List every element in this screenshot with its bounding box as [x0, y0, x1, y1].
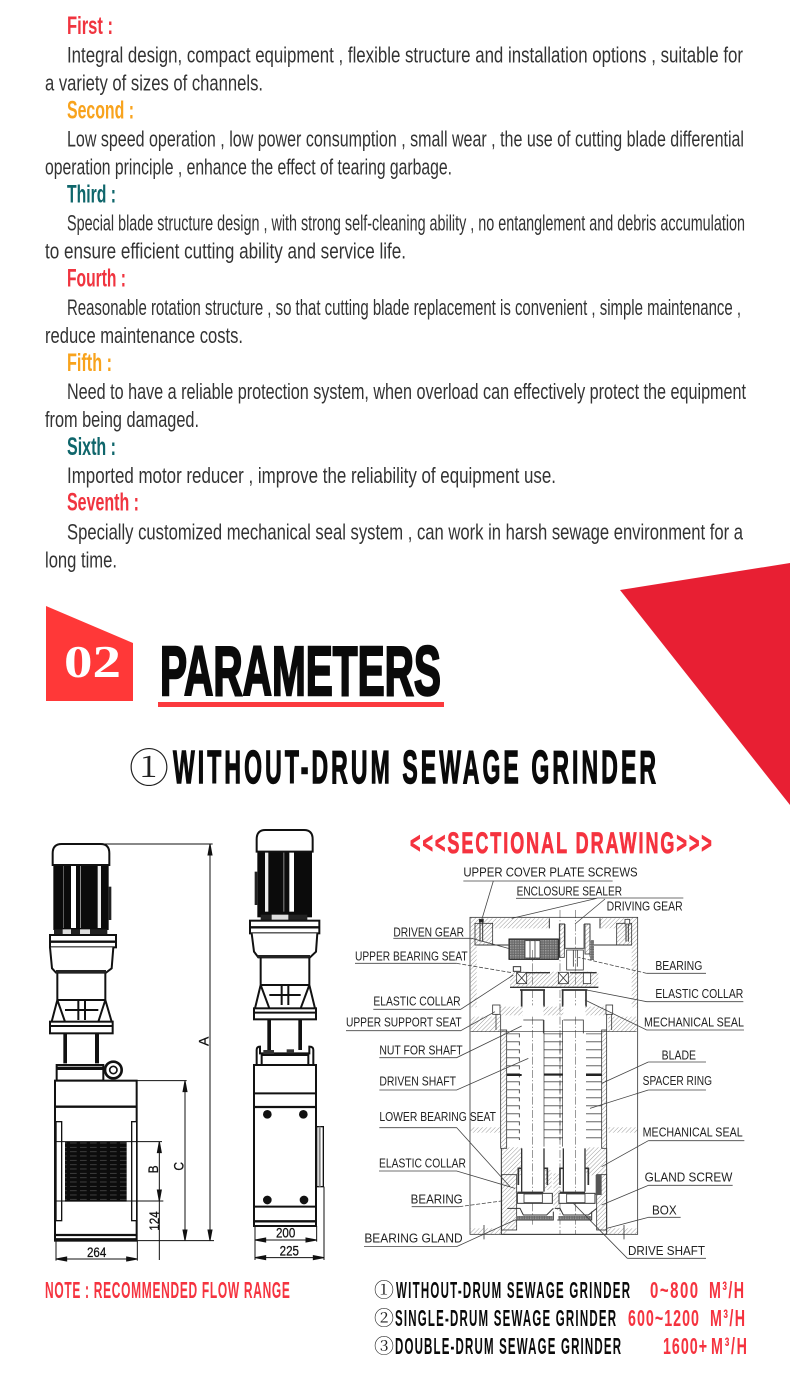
part labels: UPPER BEARING SEAT	[355, 950, 468, 964]
part labels: DRIVEN GEAR	[393, 926, 464, 940]
part labels: SPACER RING	[643, 1074, 712, 1088]
part labels: ENCLOSURE SEALER	[517, 885, 622, 899]
row: double-drum: 1600+	[663, 1335, 707, 1360]
row: single-drum: M³/H	[710, 1307, 745, 1332]
subtitle: without-drum sewage grinder: WITHOUT-DRUM SEWAGE GRINDER	[173, 741, 656, 793]
dimension labels front: 264	[87, 1244, 107, 1260]
part labels: DRIVEN SHAFT	[379, 1075, 456, 1089]
dimension lines front	[56, 844, 214, 1261]
row: without-drum: 0~800	[650, 1278, 698, 1304]
dimension labels front: 124	[146, 1211, 162, 1231]
chart: sectional drawing	[346, 866, 744, 1258]
heading: First: First :	[67, 12, 113, 40]
row: single-drum: SINGLE-DRUM SEWAGE GRINDER	[395, 1306, 616, 1331]
part labels: NUT FOR SHAFT	[379, 1043, 463, 1057]
icon: gearbox side	[250, 921, 319, 1050]
flow range table	[374, 1274, 747, 1360]
part labels: ELASTIC COLLAR	[655, 987, 743, 1001]
icon: motor front	[53, 844, 111, 935]
text block: fifth feature: from being damaged.	[45, 407, 199, 432]
row: single-drum: ②	[374, 1302, 394, 1331]
heading: sectional drawing: <<<SECTIONAL DRAWING>>>	[410, 828, 712, 860]
part labels: ELASTIC COLLAR	[373, 994, 461, 1008]
heading: parameters: PARAMETERS	[160, 632, 441, 710]
part labels: MECHANICAL SEAL	[644, 1016, 744, 1030]
part labels: BLADE	[662, 1048, 696, 1062]
heading: Sixth: Sixth :	[67, 433, 116, 461]
dimension labels front	[87, 1036, 211, 1260]
row: without-drum: WITHOUT-DRUM SEWAGE GRINDER	[396, 1278, 630, 1303]
section badge 02	[46, 606, 133, 701]
part labels: DRIVING GEAR	[607, 899, 683, 913]
heading: parameters	[158, 632, 444, 710]
subtitle: without-drum sewage grinder: ①	[129, 737, 169, 794]
text block: fifth feature	[45, 379, 746, 432]
row: single-drum: 600~1200	[628, 1307, 699, 1332]
part labels: GLAND SCREW	[645, 1171, 732, 1185]
part labels: UPPER COVER PLATE SCREWS	[463, 866, 638, 880]
part labels: DRIVE SHAFT	[628, 1244, 705, 1258]
row: without-drum	[374, 1274, 744, 1304]
icon: grinder housing side	[254, 1047, 323, 1226]
dimension labels side: 200	[276, 1225, 296, 1241]
heading: Fifth: Fifth :	[67, 349, 112, 377]
heading: Third: Third :	[67, 181, 116, 209]
text block: first feature	[45, 43, 743, 96]
part labels: MECHANICAL SEAL	[643, 1126, 743, 1140]
text block: first feature: a variety of sizes of channels.	[45, 71, 263, 96]
part labels: UPPER SUPPORT SEAT	[346, 1016, 462, 1030]
text block: seventh feature	[45, 520, 744, 572]
part labels	[346, 866, 744, 1258]
text block: third feature	[45, 211, 745, 264]
row: double-drum: M³/H	[711, 1335, 747, 1360]
text block: seventh feature: long time.	[45, 548, 117, 572]
heading: Fourth: Fourth :	[67, 265, 126, 293]
icon: grinder housing front	[55, 1062, 137, 1241]
dimension labels front: C	[170, 1162, 186, 1171]
sectional body	[470, 910, 638, 1239]
text block: second feature: operation principle , enhance the effect of tearing garbage.	[45, 155, 452, 180]
decorative red triangle	[620, 563, 790, 805]
row: without-drum: ①	[374, 1274, 394, 1303]
text block: second feature	[45, 127, 744, 180]
dimension labels side: 225	[280, 1243, 299, 1259]
row: double-drum: ③	[374, 1330, 394, 1359]
chart: side view dimension drawing	[250, 830, 324, 1260]
dimension lines side	[255, 1187, 324, 1260]
dimension labels front: B	[145, 1165, 161, 1173]
part labels: BEARING	[411, 1192, 463, 1206]
part labels: ELASTIC COLLAR	[379, 1157, 466, 1171]
dimension labels side	[276, 1225, 299, 1259]
text block: fourth feature	[45, 295, 741, 348]
part labels: BEARING GLAND	[364, 1232, 463, 1246]
leader lines	[346, 881, 744, 1258]
row: double-drum	[374, 1330, 747, 1360]
part labels: LOWER BEARING SEAT	[379, 1110, 496, 1124]
row: single-drum	[374, 1302, 745, 1332]
panel: feature list	[45, 12, 746, 572]
text block: third feature: to ensure efficient cutting ability and service life.	[45, 239, 406, 264]
text block: fourth feature: reduce maintenance costs.	[45, 323, 243, 348]
note: recommended flow range: NOTE : RECOMMENDED FLOW RANGE	[45, 1277, 290, 1303]
heading: Seventh: Seventh :	[67, 489, 139, 517]
part labels: BEARING	[655, 959, 702, 973]
part labels: BOX	[652, 1204, 677, 1218]
row: double-drum: DOUBLE-DRUM SEWAGE GRINDER	[395, 1334, 621, 1359]
icon: gearbox front	[50, 935, 116, 1063]
heading: Second: Second :	[67, 96, 134, 124]
section badge 02: 02	[64, 636, 121, 687]
text block: sixth feature: Imported motor reducer , improve the reliability of equipment use.	[67, 463, 556, 488]
dimension labels front: A	[195, 1036, 211, 1046]
chart: front view dimension drawing	[50, 844, 214, 1261]
row: without-drum: M³/H	[709, 1279, 744, 1304]
icon: motor side	[255, 830, 313, 920]
